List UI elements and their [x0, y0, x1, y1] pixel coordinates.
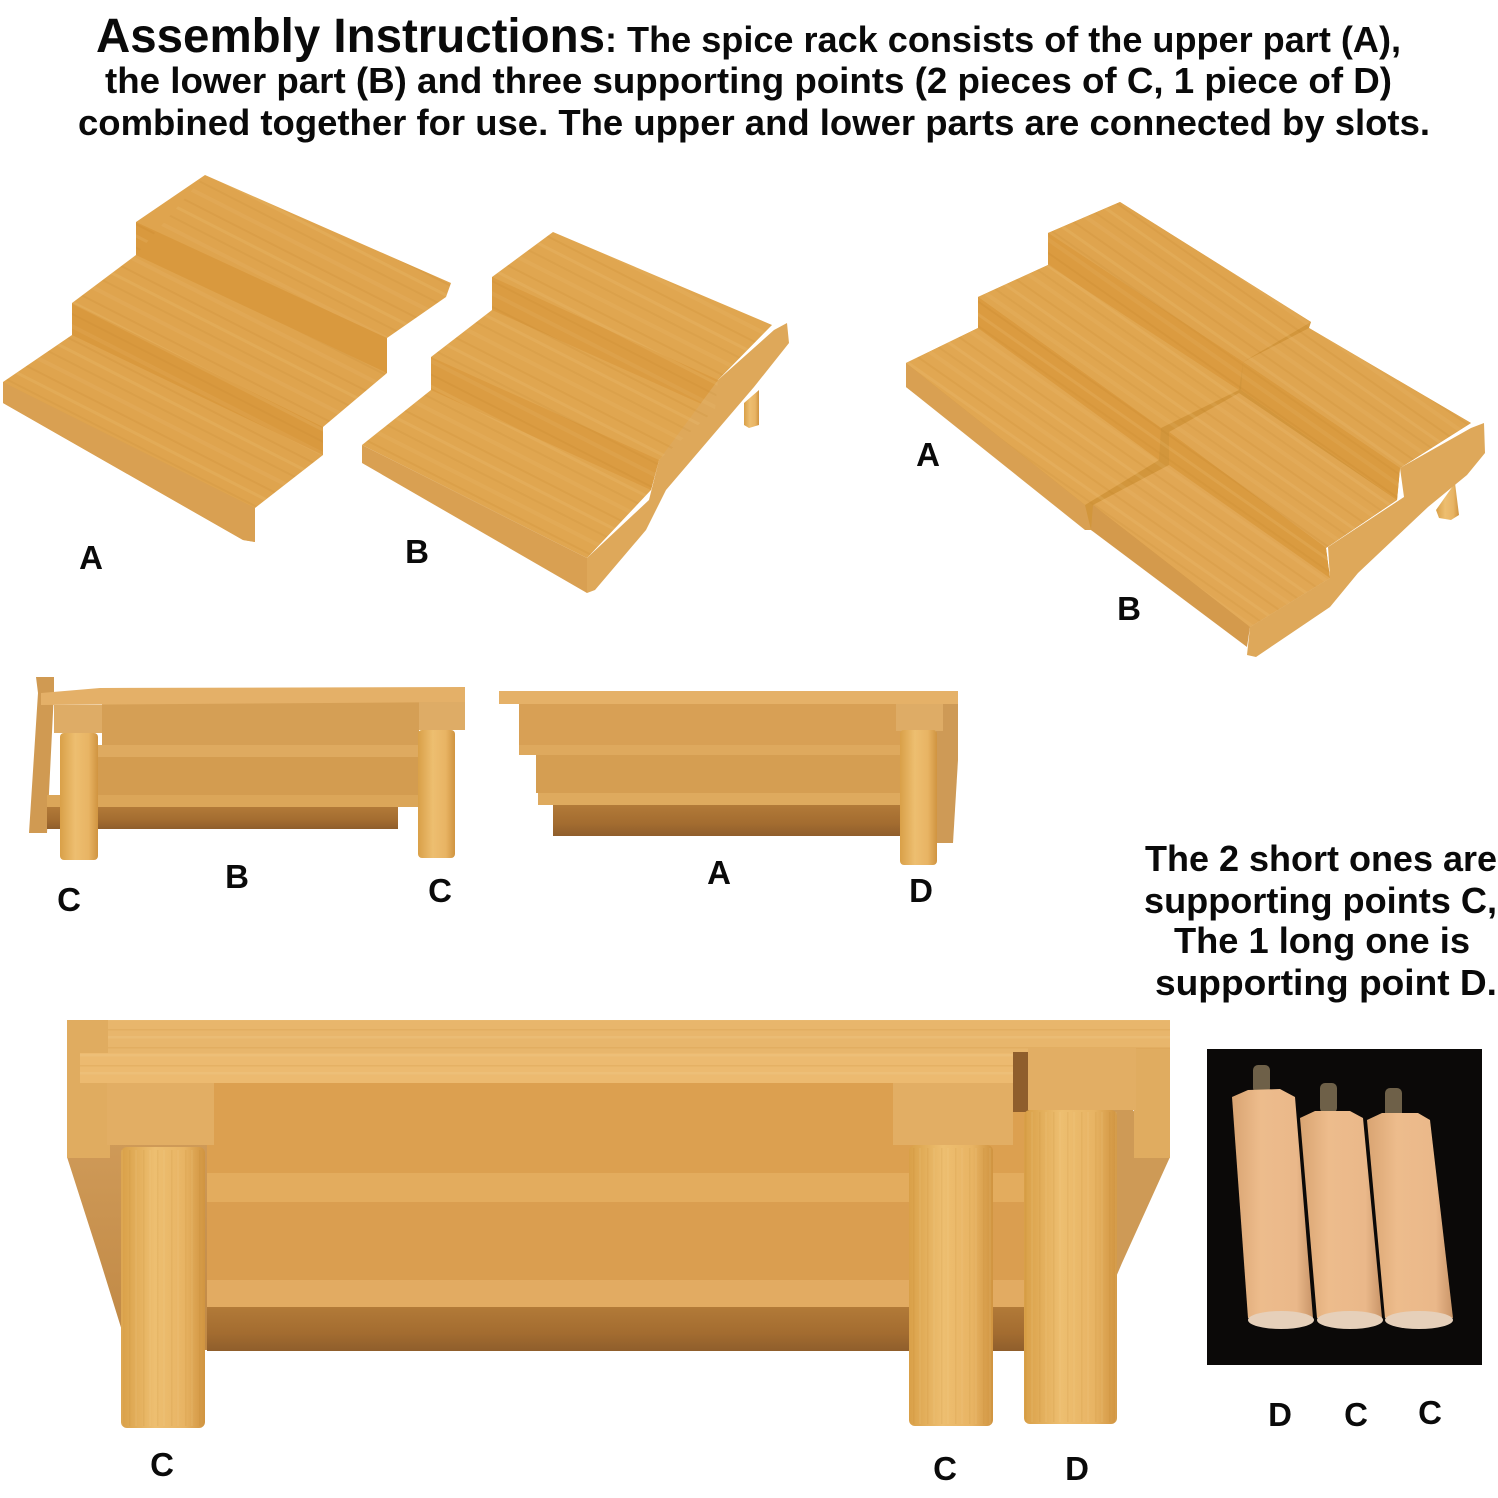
labels: parts	[57, 436, 1141, 918]
title: assembly instructions: : The spice rack consists of the upper part (A),	[605, 19, 1401, 60]
photo: support pegs on black	[1207, 1049, 1482, 1365]
peg: D	[1232, 1089, 1314, 1329]
leg: D	[900, 730, 937, 865]
leg: right C	[909, 1145, 993, 1426]
labels: parts: B	[1117, 590, 1141, 627]
title: assembly instructions: combined together for use. The upper and lower parts are connected by slots.	[78, 102, 1430, 143]
labels: parts: B	[405, 533, 429, 570]
labels: parts: C	[428, 872, 452, 909]
title: assembly instructions: Assembly Instructions	[96, 10, 605, 63]
title: assembly instructions: the lower part (B) and three supporting points (2 pieces of C, 1 piece of D)	[105, 60, 1392, 101]
labels: enlarged view: C	[150, 1446, 174, 1483]
photo: enlarged underside view	[67, 1020, 1170, 1428]
title: assembly instructions	[78, 10, 1430, 143]
leg: D	[1024, 1110, 1117, 1424]
labels: pegs	[1268, 1394, 1442, 1433]
labels: parts: A	[79, 539, 103, 576]
photo: front view of part A	[499, 691, 958, 865]
leg: left C	[121, 1147, 205, 1428]
labels: parts: B	[225, 858, 249, 895]
peg: C	[1367, 1113, 1453, 1329]
labels: pegs: C	[1418, 1394, 1442, 1431]
text: supporting points note: The 1 long one is	[1174, 920, 1470, 961]
labels: parts: A	[707, 854, 731, 891]
text: supporting points note: The 2 short ones are	[1145, 838, 1497, 879]
text: supporting points note: supporting points C,	[1144, 880, 1497, 921]
labels: parts: A	[916, 436, 940, 473]
photo: assembled rack	[906, 202, 1485, 657]
labels: parts: D	[909, 872, 933, 909]
peg: C	[1300, 1111, 1383, 1329]
text: supporting points note: supporting point D.	[1155, 962, 1497, 1003]
photo: lower part B	[362, 232, 789, 593]
photo: upper part A	[3, 175, 451, 542]
labels: enlarged view: C	[933, 1450, 957, 1487]
labels: enlarged view: D	[1065, 1450, 1089, 1487]
photo: front view of part B	[29, 677, 465, 860]
labels: parts: C	[57, 881, 81, 918]
leg: left C	[60, 733, 98, 860]
labels: pegs: C	[1344, 1396, 1368, 1433]
text: supporting points note	[1144, 838, 1497, 1003]
labels: enlarged view	[150, 1446, 1089, 1487]
labels: pegs: D	[1268, 1396, 1292, 1433]
leg: right C	[418, 730, 455, 858]
